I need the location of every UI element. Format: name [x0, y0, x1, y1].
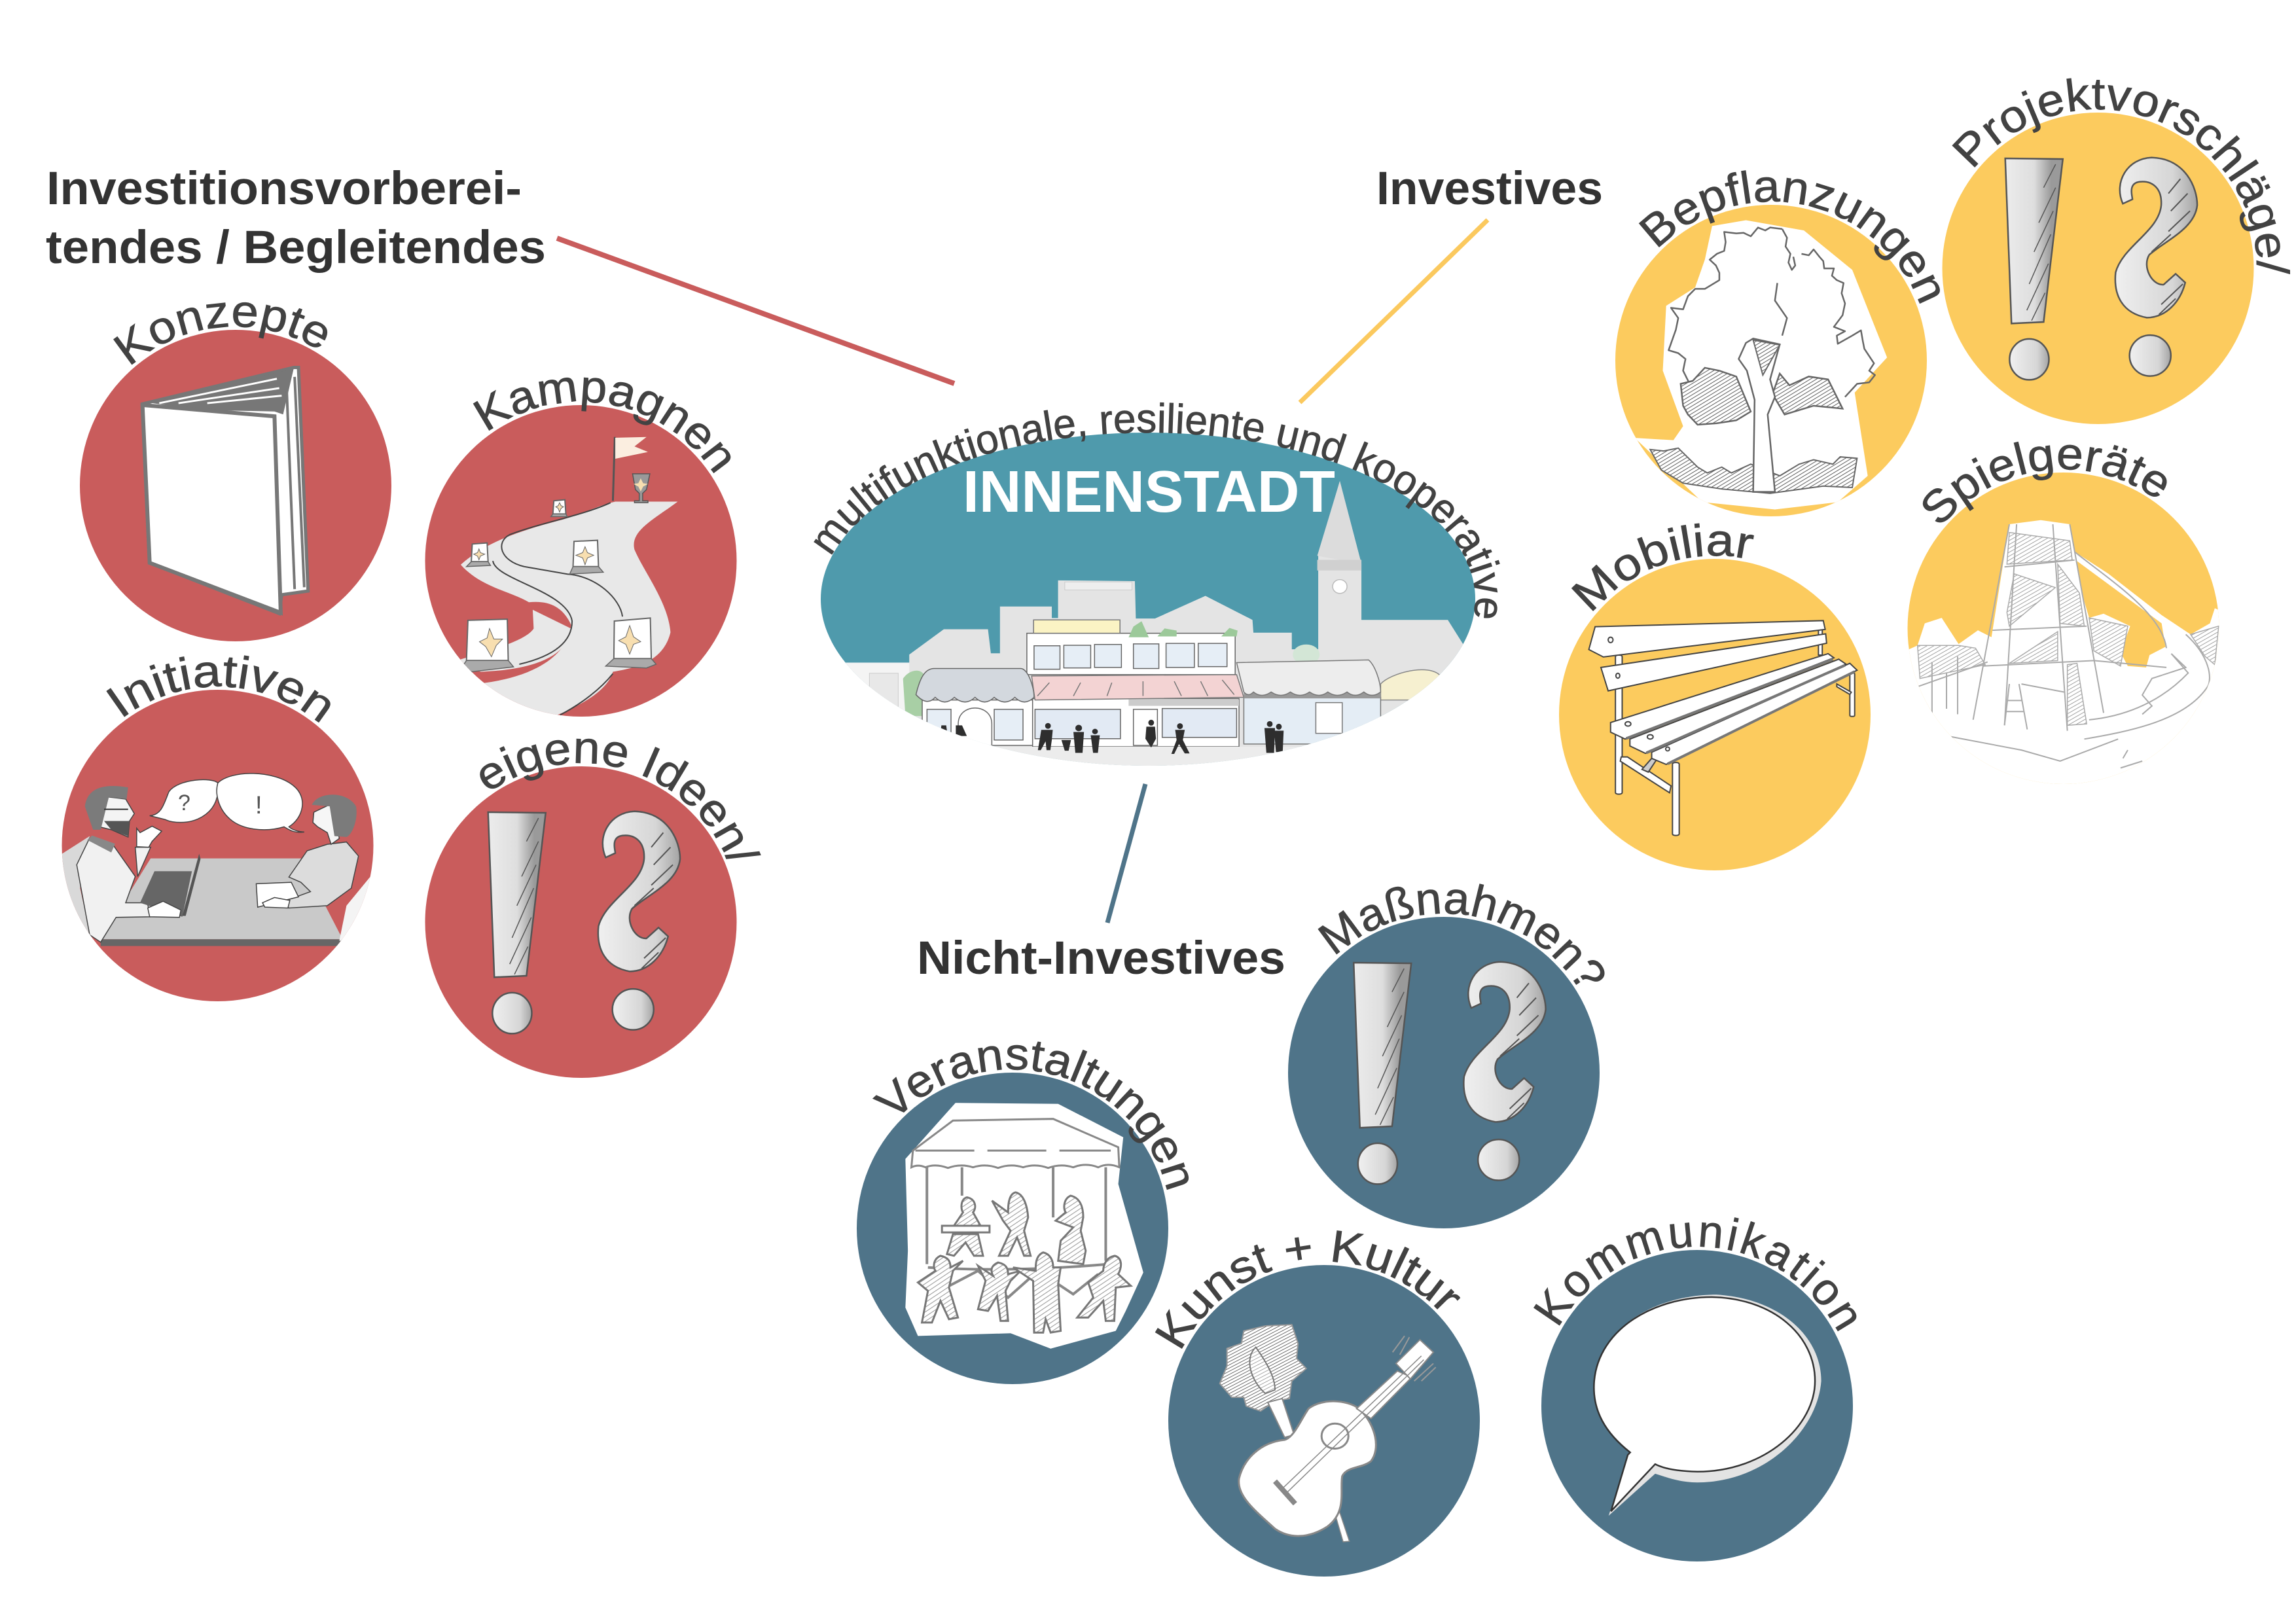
circle	[1288, 917, 1600, 1228]
teal ellipse	[821, 433, 1475, 766]
people	[940, 720, 1283, 754]
panel: Konzepte	[80, 302, 391, 641]
curved caption: multifunktionale, resiliente und kooperative	[814, 402, 1500, 618]
icon: exclamation and question marks	[1354, 962, 1546, 1184]
icon: speech bubble	[1594, 1294, 1821, 1516]
label: Bepflanzungen	[1639, 170, 1940, 304]
label: Kommunikation	[1534, 1217, 1856, 1331]
connector line: yellow	[1300, 220, 1488, 402]
town scene	[846, 481, 1463, 766]
label: eigene Ideen/	[480, 738, 761, 859]
circle	[1559, 559, 1871, 870]
icon: flame and guitar	[1220, 1325, 1436, 1542]
title: INNENSTADT: INNENSTADT	[963, 459, 1335, 525]
circle	[1541, 1250, 1853, 1561]
panel: Spielgeräte	[1907, 441, 2219, 784]
icon: tree on torn paper	[1635, 221, 1887, 509]
circle	[1943, 113, 2254, 424]
panel: Kunst + Kultur	[1155, 1230, 1480, 1577]
bubble mark: question: ?	[178, 791, 190, 815]
heading: Nicht-Investives: Nicht-Investives	[917, 933, 1285, 984]
icon: book	[143, 368, 308, 614]
panel: Kommunikation	[1534, 1217, 1856, 1561]
building row	[1027, 633, 1235, 675]
heading: Investitionsvorbereitendes / Begleitendes: tendes / Begleitendes	[46, 222, 546, 274]
label: Projektvorschläge/	[1952, 78, 2290, 275]
panel: Mobiliar	[1559, 524, 1871, 870]
panel: Bepflanzungen	[1615, 170, 1940, 516]
circle	[1168, 1265, 1480, 1577]
icon: winding road with milestones	[452, 437, 677, 719]
icon: exclamation and question marks	[2005, 158, 2197, 380]
icon: bench	[1589, 620, 1857, 836]
circle	[1615, 205, 1927, 516]
circle	[80, 330, 391, 641]
circle	[425, 766, 737, 1078]
panel: Kampagnen	[425, 377, 737, 717]
circle	[857, 1073, 1168, 1384]
panel: Projektvorschläge	[1943, 78, 2290, 424]
bubble mark: exclamation: !	[255, 792, 262, 819]
label: Konzepte	[113, 302, 327, 365]
circle	[1907, 473, 2219, 784]
illustration: two people talking at a table	[58, 774, 370, 946]
label: Mobiliar	[1571, 524, 1754, 611]
label: Veranstaltungen	[872, 1042, 1189, 1190]
heading: Investitionsvorbereitendes / Begleitendes: Investitionsvorberei-	[46, 163, 522, 215]
panel: Maßnahmen	[1288, 883, 1605, 1228]
label: Kampagnen	[473, 377, 730, 474]
label: Kunst + Kultur	[1155, 1230, 1461, 1349]
label: Spielgeräte	[1923, 441, 2167, 522]
panel: Initiativen	[62, 655, 373, 1001]
icon: exclamation and question marks	[488, 812, 680, 1033]
panel: Veranstaltungen	[857, 1042, 1189, 1384]
connector line: red	[557, 238, 954, 383]
icon: stage with band and dancers	[905, 1103, 1143, 1349]
circle	[62, 690, 373, 1001]
heading: Investives: Investives	[1376, 163, 1603, 215]
label: Initiativen	[106, 655, 331, 722]
panel: eigene Ideen	[425, 738, 761, 1078]
circle	[425, 405, 737, 717]
icon: slide tower	[1905, 520, 2225, 789]
panel: innenstadt centre ellipse	[814, 402, 1500, 766]
connector line: blue	[1107, 784, 1145, 923]
label: Maßnahmen?	[1318, 883, 1605, 985]
